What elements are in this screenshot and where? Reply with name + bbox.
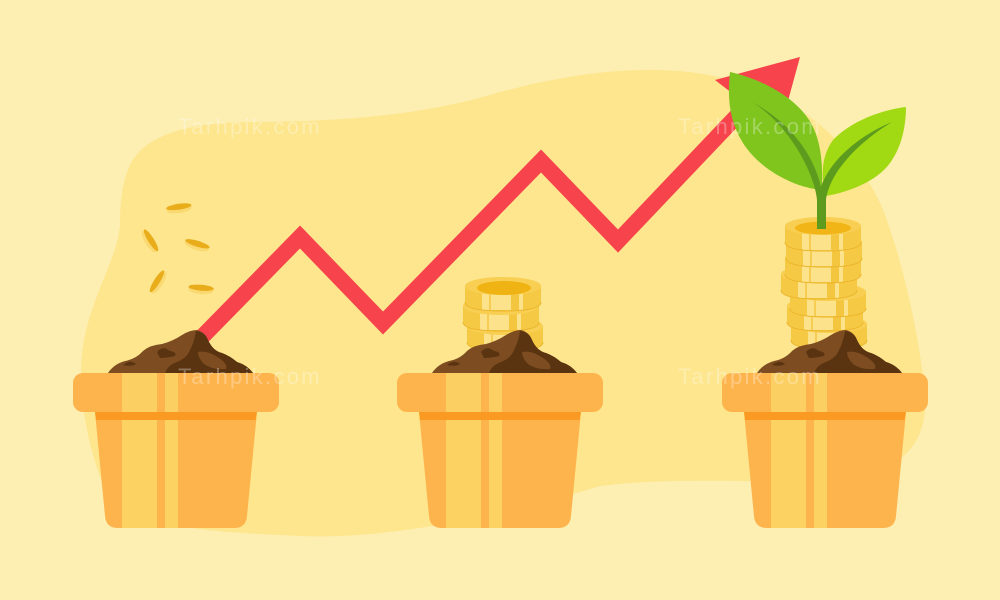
coin stack: pot 2 xyxy=(463,277,543,351)
growth arrow xyxy=(200,57,800,339)
flower pot 3 xyxy=(722,373,928,528)
background blob xyxy=(81,70,925,536)
watermark text xyxy=(178,114,822,389)
stem and veins xyxy=(752,102,892,229)
watermark text: Tarhpik.com xyxy=(678,364,822,389)
plant sprout xyxy=(729,72,906,229)
watermark text: Tarhpik.com xyxy=(678,114,822,139)
right leaf xyxy=(823,107,906,196)
flower pot 1 xyxy=(73,373,279,528)
coin stack: pot 3 xyxy=(781,217,867,349)
falling coins xyxy=(139,202,214,296)
watermark text: Tarhpik.com xyxy=(178,114,322,139)
soil xyxy=(108,330,902,373)
flower pot 2 xyxy=(397,373,603,528)
left leaf xyxy=(729,72,822,190)
watermark text: Tarhpik.com xyxy=(178,364,322,389)
